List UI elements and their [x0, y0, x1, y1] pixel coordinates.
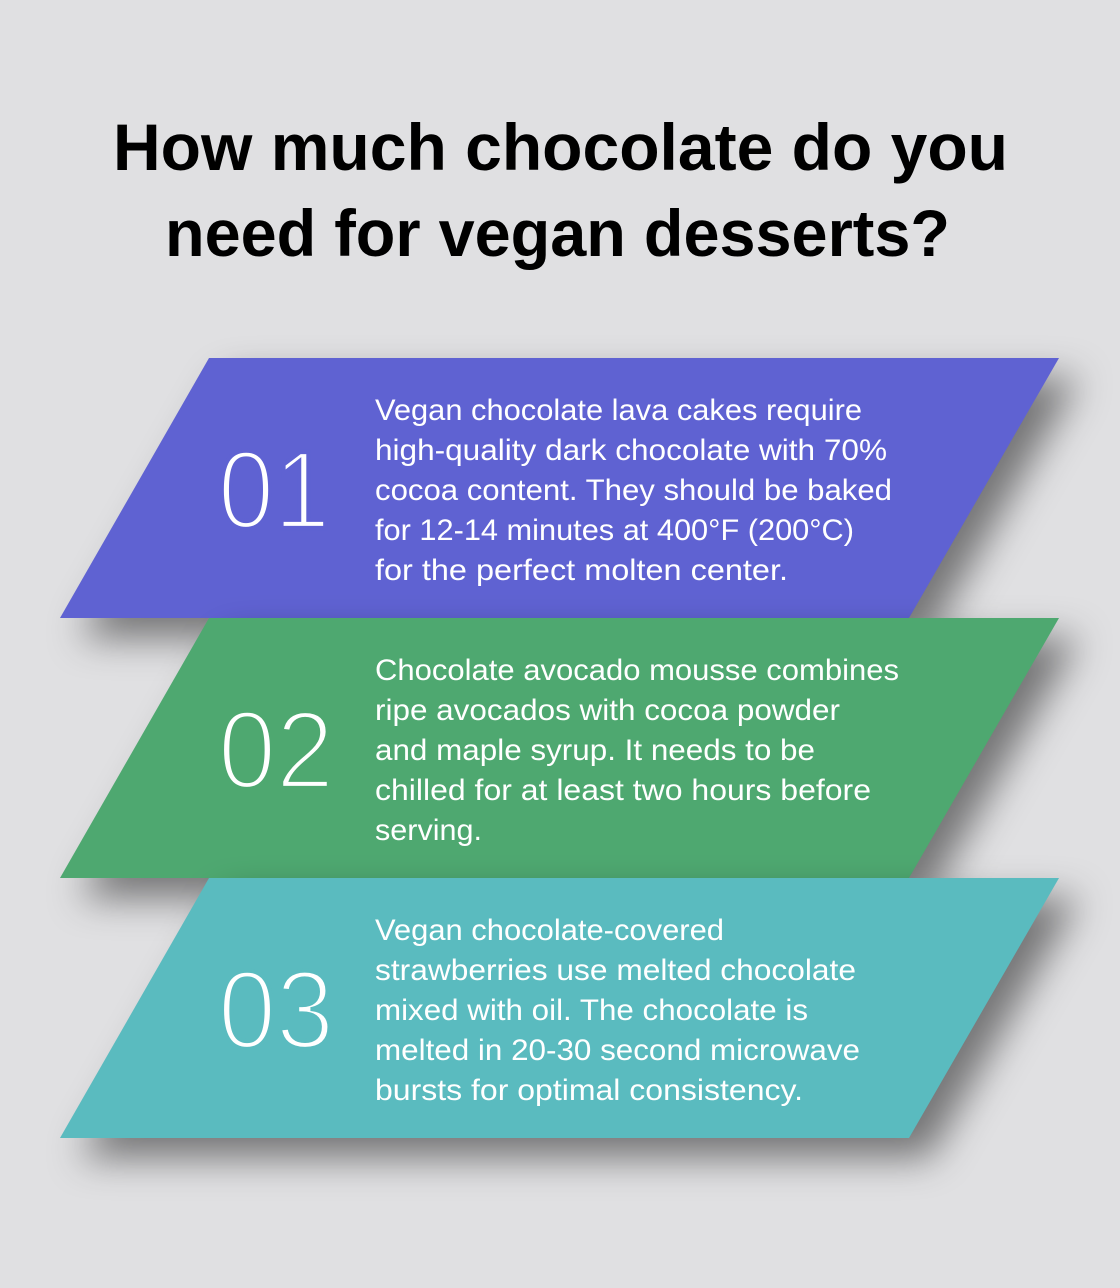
step 01 text: high-quality dark chocolate with 70% — [375, 434, 887, 467]
step 03 text — [375, 914, 860, 1107]
panel: step 03 — [60, 878, 1079, 1158]
step 02 text: and maple syrup. It needs to be — [375, 734, 815, 767]
step 03 text: Vegan chocolate-covered — [375, 914, 724, 947]
step 02 text: Chocolate avocado mousse combines — [375, 654, 899, 687]
step 03 text: bursts for optimal consistency. — [375, 1074, 803, 1107]
panel: step 02 — [60, 618, 1079, 898]
step 01 text: for the perfect molten center. — [375, 554, 788, 587]
step 01 text — [375, 394, 892, 587]
title: How much chocolate do you — [113, 110, 1008, 184]
step 02 shape — [60, 618, 1059, 878]
step 03 text: strawberries use melted chocolate — [375, 954, 856, 987]
step 02 text: ripe avocados with cocoa powder — [375, 694, 840, 727]
step 01 number: 01 — [218, 429, 330, 552]
step 03 number: 03 — [218, 949, 334, 1072]
step 02 text: serving. — [375, 814, 482, 847]
step 02 text — [375, 654, 899, 847]
title: need for vegan desserts? — [165, 196, 950, 270]
step 03 shape — [60, 878, 1059, 1138]
step 01 text: for 12-14 minutes at 400°F (200°C) — [375, 514, 854, 547]
step 01 shape — [60, 358, 1059, 618]
step 01 text: Vegan chocolate lava cakes require — [375, 394, 862, 427]
step 02 text: chilled for at least two hours before — [375, 774, 871, 807]
step 03 text: mixed with oil. The chocolate is — [375, 994, 808, 1027]
panel: step 01 — [60, 358, 1079, 638]
step 01 text: cocoa content. They should be baked — [375, 474, 892, 507]
title — [113, 110, 1008, 270]
step 02 number: 02 — [218, 689, 334, 812]
step 03 text: melted in 20-30 second microwave — [375, 1034, 860, 1067]
